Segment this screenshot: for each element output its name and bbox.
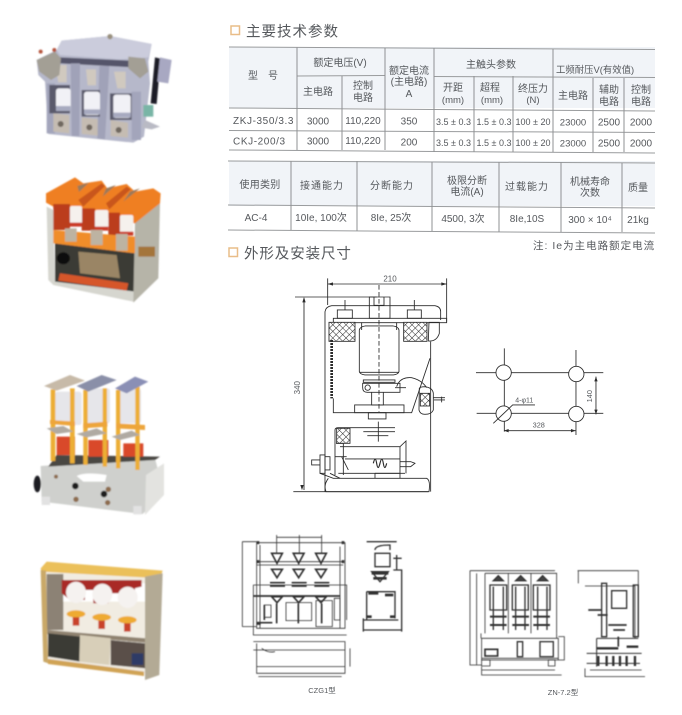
table: usage category and capabilities: 机械寿命: [570, 175, 610, 188]
table: technical parameters: 终压力: [518, 82, 548, 95]
table: technical parameters: 1.5 ± 0.3: [477, 138, 511, 148]
table: technical parameters: ZKJ-350/3.3: [233, 116, 294, 127]
table: usage category and capabilities: 8Ie, 25次: [371, 211, 411, 224]
label: ZN-7.2 type: ZN-7.2型: [548, 688, 579, 697]
table: usage category and capabilities: 电流(A): [450, 185, 484, 198]
table: technical parameters: 3000: [307, 136, 330, 148]
drawing: mounting hole layout: [476, 348, 603, 435]
table: technical parameters: (N): [526, 95, 540, 106]
table: usage category and capabilities: 过载能力: [505, 180, 549, 193]
table: technical parameters: 110,220: [345, 116, 381, 127]
table: technical parameters: CKJ-200/3: [233, 136, 286, 148]
drawing: outline dimensions: 210: [383, 274, 397, 283]
table: technical parameters: 控制: [353, 79, 373, 92]
table: technical parameters: 110,220: [345, 136, 381, 147]
table: usage category and capabilities: 300 × 10⁴: [568, 215, 612, 226]
table: usage category and capabilities: 4500, 3次: [441, 212, 485, 225]
table: technical parameters: 额定电压(V): [313, 56, 367, 69]
table: usage category and capabilities: 接通能力: [300, 179, 344, 192]
table: technical parameters: 3.5 ± 0.3: [436, 117, 471, 127]
photo: orange vacuum contactor: [46, 177, 161, 303]
table: technical parameters: 23000: [560, 118, 586, 128]
table: technical parameters: 100 ± 20: [516, 138, 550, 148]
table: technical parameters: 2500: [598, 138, 621, 150]
table: technical parameters: 350: [401, 116, 418, 128]
table: technical parameters: 100 ± 20: [516, 117, 550, 127]
table: technical parameters: 电路: [631, 95, 651, 108]
note: Ie rated current: 注: Ie为主电路额定电流: [533, 239, 655, 252]
drawing: ZN-7.2 contactor: [470, 571, 645, 677]
table: usage category and capabilities: 8Ie,10S: [510, 214, 545, 225]
table: technical parameters: 3000: [307, 116, 330, 128]
table: technical parameters: 200: [401, 138, 418, 148]
drawing: outline dimensions: 340: [293, 380, 302, 394]
table: technical parameters: (mm): [442, 95, 464, 106]
photo: grey vacuum contactor: [37, 34, 172, 143]
table: usage category and capabilities: 10Ie, 100次: [295, 211, 347, 224]
table: technical parameters: (主电路): [391, 75, 427, 88]
table: usage category and capabilities: 分断能力: [370, 179, 414, 192]
table: usage category and capabilities: 21kg: [627, 215, 649, 226]
table: technical parameters: 开距: [443, 82, 463, 94]
table: technical parameters: 主电路: [303, 85, 333, 98]
heading: outline and mounting dimensions: 外形及安装尺寸: [244, 246, 352, 262]
table: technical parameters: 2500: [598, 118, 621, 128]
table: technical parameters: 电路: [353, 91, 373, 104]
table: technical parameters: A: [406, 89, 413, 100]
table: technical parameters: 辅助: [599, 83, 619, 96]
table: technical parameters: 额定电流: [389, 64, 429, 77]
table: technical parameters: 1.5 ± 0.3: [477, 117, 511, 127]
table: technical parameters: 电路: [599, 95, 619, 108]
table: technical parameters: 23000: [560, 138, 586, 150]
table: technical parameters: 3.5 ± 0.3: [436, 138, 471, 148]
label: CZG1 type: CZG1型: [308, 686, 336, 695]
table: usage category and capabilities: [228, 161, 655, 233]
table: technical parameters: 2000: [630, 118, 653, 128]
drawing: CZG1 contactor: [242, 535, 402, 677]
table: technical parameters: 主电路: [558, 89, 588, 102]
table: technical parameters: (mm): [481, 95, 503, 106]
photo: yellow post vacuum contactor: [34, 375, 164, 515]
heading: main technical parameters: 主要技术参数: [246, 24, 339, 40]
table: usage category and capabilities: 次数: [580, 186, 600, 199]
table: usage category and capabilities: AC-4: [245, 213, 268, 224]
table: technical parameters: 主触头参数: [466, 58, 516, 71]
drawing: outline dimensions: [293, 274, 447, 492]
drawing: mounting hole layout: 4-φ11: [515, 397, 533, 404]
table: technical parameters: [229, 47, 655, 153]
table: technical parameters: 控制: [631, 83, 651, 96]
drawing: mounting hole layout: 140: [585, 390, 594, 402]
table: technical parameters: 超程: [480, 81, 500, 94]
drawing: mounting hole layout: 328: [533, 421, 545, 430]
table: usage category and capabilities: 极限分断: [447, 174, 487, 187]
table: usage category and capabilities: 使用类别: [239, 178, 281, 191]
table: usage category and capabilities: 质量: [628, 182, 648, 194]
table: technical parameters: 型 号: [248, 69, 278, 82]
photo: yellow framed vacuum contactor: [41, 562, 163, 680]
table: technical parameters: 2000: [630, 138, 653, 150]
table: technical parameters: 工频耐压V(有效值): [556, 64, 634, 75]
